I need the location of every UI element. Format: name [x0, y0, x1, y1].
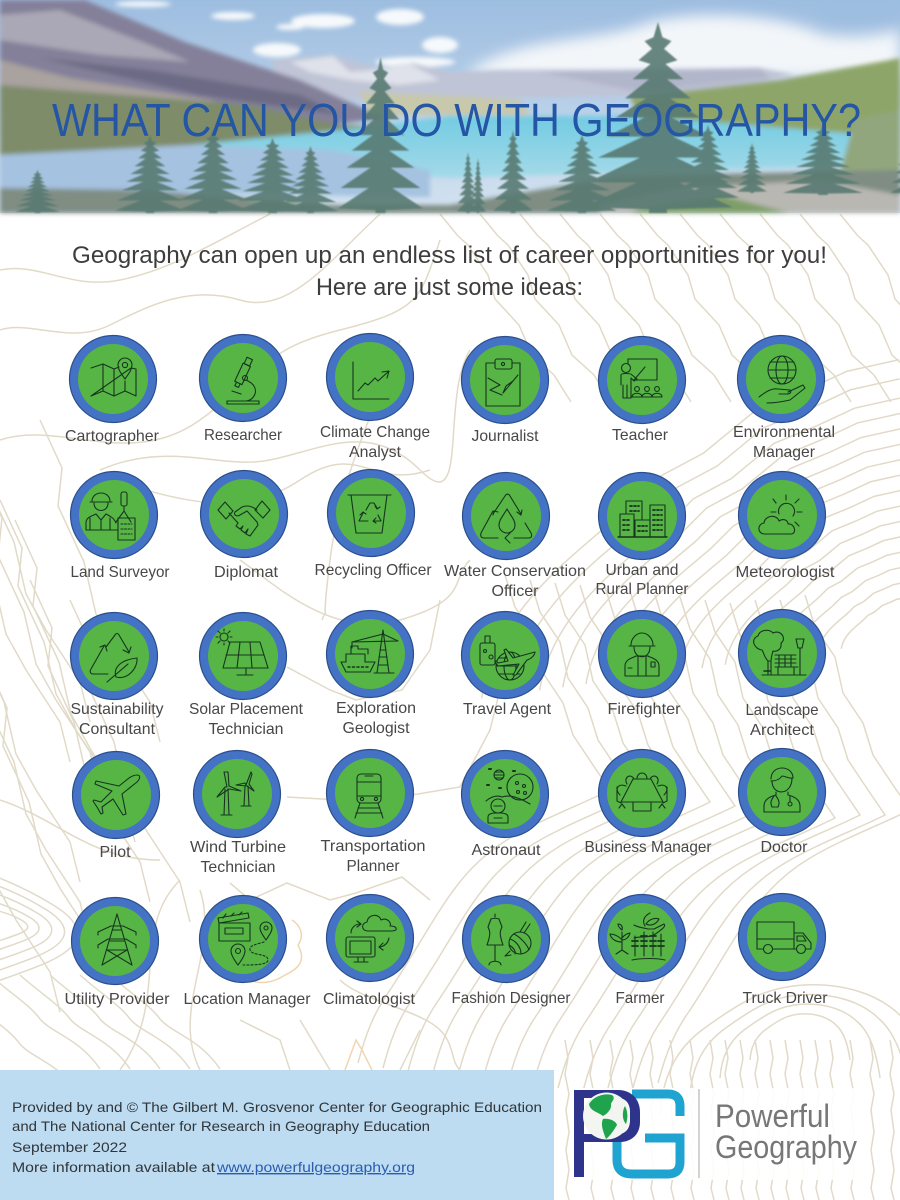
career: Journalist	[462, 336, 548, 445]
icon: electricity pylon	[98, 914, 136, 965]
intro text	[72, 242, 827, 301]
label: Diplomat	[214, 564, 279, 581]
career: Landscape Architect	[738, 610, 826, 739]
icon: cloud, monitor and arrows	[346, 915, 396, 962]
career: Exploration Geologist: Geologist	[342, 720, 410, 737]
intro text: Geography can open up an endless list of career opportunities for you!	[72, 242, 827, 269]
credits text: September 2022	[12, 1139, 127, 1155]
label: Exploration	[336, 700, 416, 717]
career: Urban and Rural Planner: Rural Planner	[596, 581, 689, 598]
career: Climatologist	[323, 894, 416, 1008]
logo wordmark: Geography	[715, 1129, 857, 1165]
label: Solar Placement	[189, 701, 304, 718]
career: Firefighter	[598, 610, 686, 718]
career: Doctor	[738, 748, 826, 856]
label: Farmer	[616, 990, 665, 1007]
icon: recycling bin	[348, 495, 391, 533]
career: Water Conservation Officer: Officer	[492, 583, 539, 600]
label: Firefighter	[608, 701, 681, 718]
label: Researcher	[204, 427, 283, 444]
label: Fashion Designer	[452, 990, 571, 1007]
career: Environmental Manager	[733, 336, 835, 461]
career: Climate Change Analyst: Analyst	[349, 444, 402, 461]
label: Urban and	[606, 562, 678, 579]
label: Travel Agent	[463, 701, 552, 718]
label: Doctor	[760, 839, 808, 856]
icon: doctor with stethoscope	[764, 768, 800, 812]
career: Land Surveyor	[70, 472, 170, 581]
icon: handshake	[218, 501, 270, 536]
career: Travel Agent	[462, 612, 552, 718]
career: Urban and Rural Planner	[596, 472, 689, 598]
credits text: and The National Center for Research in Geography Education	[12, 1118, 430, 1134]
footer panel: credits	[0, 1070, 554, 1200]
label: Landscape	[746, 702, 819, 719]
label: Truck Driver	[742, 990, 828, 1007]
credits text: www.powerfulgeography.org	[216, 1159, 415, 1175]
career: Teacher	[598, 336, 686, 444]
career: Truck Driver	[738, 894, 828, 1007]
career: Fashion Designer	[452, 896, 571, 1007]
label: Astronaut	[472, 842, 541, 859]
credits text: Provided by and © The Gilbert M. Grosvenor Center for Geographic Education	[12, 1099, 542, 1115]
icon: teacher at board	[621, 359, 662, 398]
icon: solar panel with sun	[216, 629, 268, 675]
label: Recycling Officer	[314, 562, 432, 579]
icon: firefighter	[625, 633, 659, 676]
icon: suitcase, globe, plane	[480, 636, 535, 680]
intro text: Here are just some ideas:	[316, 274, 583, 301]
label: Wind Turbine	[190, 839, 286, 856]
label: Meteorologist	[736, 564, 835, 581]
career: Sustainability Consultant: Consultant	[79, 721, 156, 738]
career: Solar Placement Technician: Technician	[208, 721, 284, 738]
logo mark: PG with globe	[574, 1090, 680, 1177]
career: Transportation Planner	[320, 750, 426, 875]
label: Utility Provider	[64, 991, 170, 1008]
icon: mannequin and yarn	[487, 914, 531, 965]
credits text	[12, 1099, 542, 1175]
career: Solar Placement Technician	[189, 612, 304, 738]
career: Recycling Officer	[314, 470, 432, 579]
career: Diplomat	[200, 470, 288, 581]
career: Utility Provider	[64, 898, 170, 1008]
icon: delivery truck	[757, 922, 811, 954]
career: Farmer	[598, 894, 686, 1007]
label: Water Conservation	[444, 563, 586, 580]
icon: boardroom table	[617, 773, 667, 811]
career: Meteorologist	[736, 472, 835, 581]
label: Sustainability	[70, 701, 164, 718]
career: Landscape Architect: Architect	[750, 722, 815, 739]
icon: microscope	[227, 357, 259, 404]
career: Transportation Planner: Planner	[346, 858, 400, 875]
icon: tree, bench and lamp	[754, 630, 806, 675]
logo: Powerful Geography	[570, 1088, 862, 1180]
logo wordmark: Powerful	[715, 1098, 830, 1134]
icon: rising line chart	[353, 362, 389, 399]
icon: train on tracks	[355, 774, 383, 818]
icon: recycle arrows with leaf	[90, 634, 137, 682]
icon: sun and cloud	[759, 495, 802, 534]
icon: folded map with pin	[91, 358, 136, 396]
career: Wind Turbine Technician: Technician	[200, 859, 276, 876]
label: Cartographer	[65, 428, 160, 445]
icon: water drop in recycling triangle	[481, 494, 532, 543]
career: Astronaut	[462, 750, 548, 859]
career: Exploration Geologist	[326, 610, 416, 737]
icon: astronaut, moon and planet	[486, 769, 533, 823]
label: Land Surveyor	[70, 564, 170, 581]
label: Journalist	[472, 428, 539, 445]
career: Location Manager	[184, 896, 311, 1008]
career: Water Conservation Officer	[444, 472, 586, 600]
icon: clipboard and pen	[486, 359, 520, 406]
icon: clapperboard and map pins	[218, 912, 272, 965]
icon: globe over open hand	[759, 356, 805, 403]
label: Climatologist	[323, 991, 416, 1008]
header photo: mountain lake with spruce trees	[0, 0, 900, 213]
career: Cartographer	[65, 336, 160, 445]
label: Pilot	[100, 844, 131, 861]
icon: airplane	[93, 775, 140, 815]
logo wordmark	[715, 1098, 857, 1165]
label: Teacher	[612, 427, 669, 444]
career: Sustainability Consultant	[70, 612, 164, 738]
career: Wind Turbine Technician	[190, 750, 286, 876]
career: Climate Change Analyst	[320, 334, 430, 461]
career: Environmental Manager: Manager	[753, 444, 816, 461]
icon: surveyor with tripod and checklist	[86, 492, 135, 540]
label: Transportation	[320, 838, 426, 855]
icon: drilling tower and ship	[341, 630, 398, 673]
credits text: More information available at	[12, 1159, 215, 1175]
label: Environmental	[733, 424, 835, 441]
icon: plants, wheat and hand	[610, 913, 665, 960]
icon: city buildings	[618, 501, 667, 537]
label: Location Manager	[184, 991, 311, 1008]
icon: wind turbines	[217, 772, 254, 815]
career: Pilot	[72, 752, 160, 861]
label: Climate Change	[320, 424, 430, 441]
label: Business Manager	[584, 839, 712, 856]
career: Researcher	[200, 334, 286, 444]
career: Business Manager	[584, 750, 712, 856]
